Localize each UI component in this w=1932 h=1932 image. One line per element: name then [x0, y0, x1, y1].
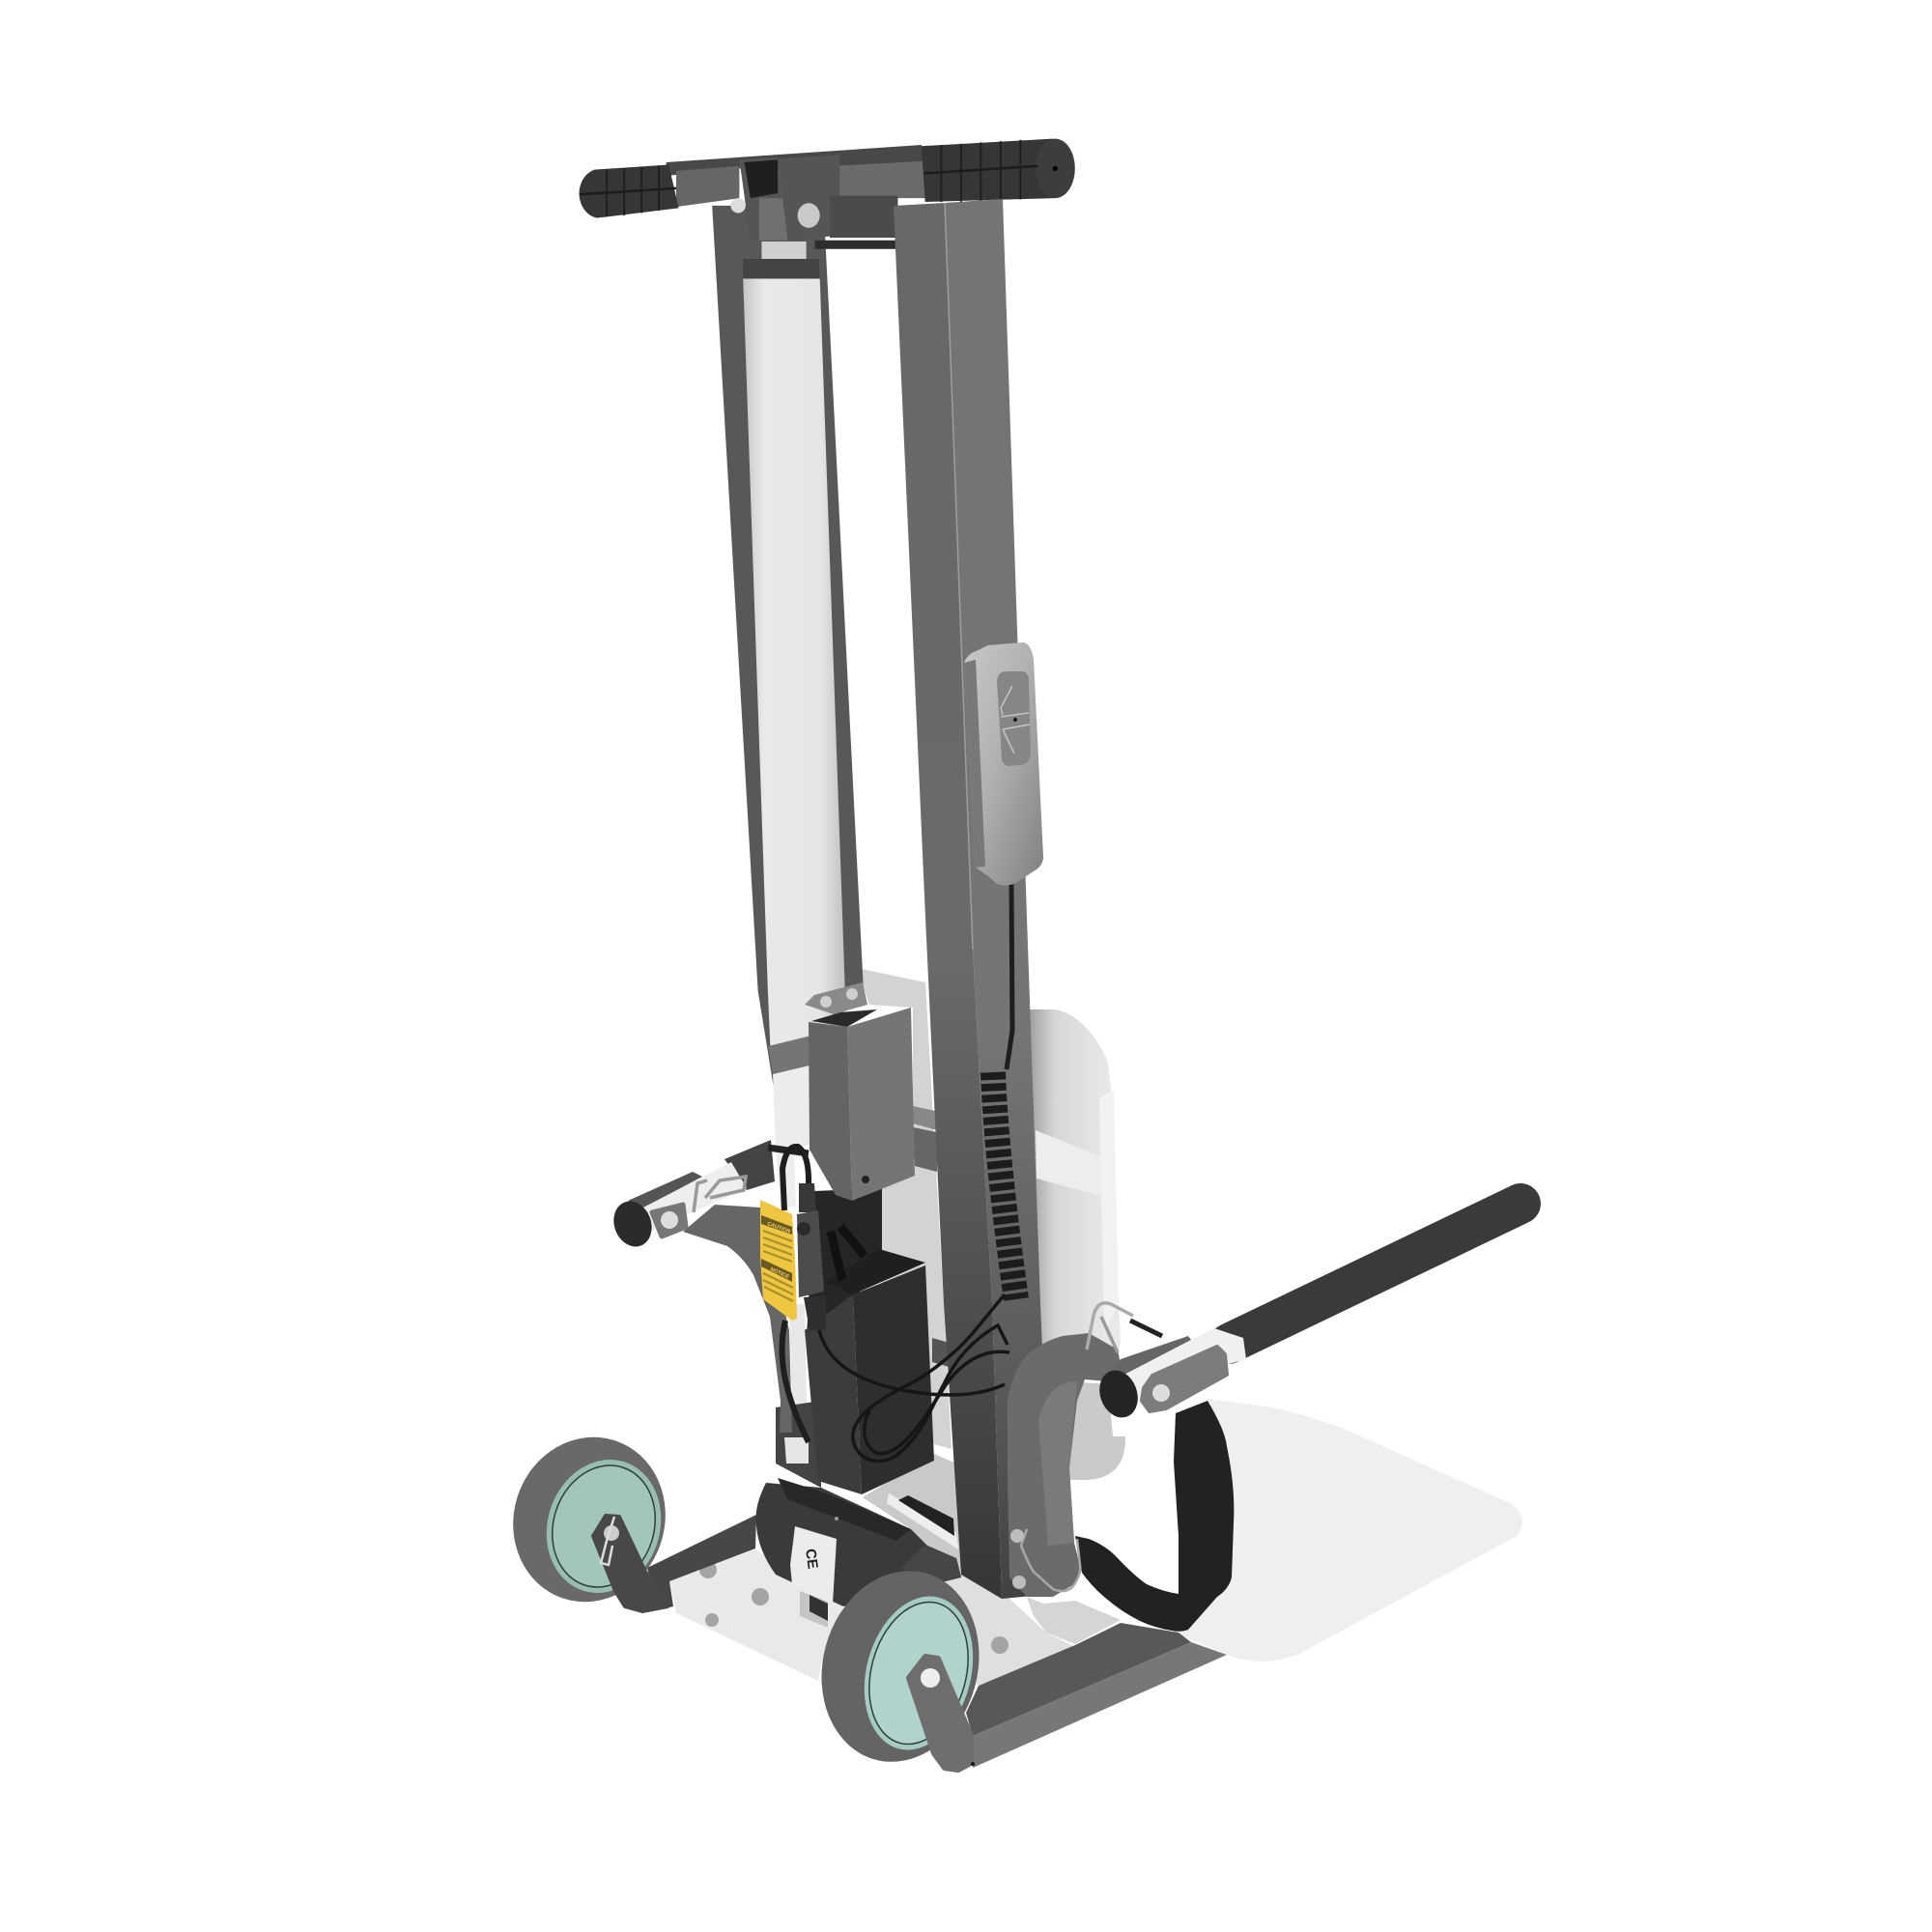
rear base arm	[647, 1515, 756, 1610]
handle bracket housing	[1067, 1381, 1125, 1480]
hook and pin	[1010, 1529, 1080, 1591]
mechanism behind power box	[863, 1454, 961, 1570]
carabiner and pin	[1087, 1303, 1162, 1352]
long side handle	[1094, 1204, 1520, 1423]
panel cross piece	[1036, 1130, 1101, 1196]
safety strap	[1075, 1401, 1234, 1632]
warning tag: CAUTION	[766, 1221, 791, 1235]
warning tag	[760, 1200, 797, 1321]
coiled remote cord	[993, 884, 1016, 1299]
right grip	[922, 139, 1075, 202]
top handle bar	[580, 139, 1075, 249]
drive motor	[755, 1478, 961, 1606]
front base frame	[966, 1623, 1227, 1768]
power supply box	[805, 1249, 934, 1494]
rear caster arm	[593, 1516, 668, 1611]
linear actuator tube	[743, 242, 846, 1488]
rear wheel	[492, 1417, 687, 1622]
motor label: CE	[802, 1548, 821, 1570]
base white mounting plate	[669, 1546, 1121, 1686]
hand remote	[964, 642, 1043, 885]
coiled power cables	[819, 1294, 1009, 1462]
cable tie and plug	[768, 1147, 865, 1442]
left grip	[580, 165, 679, 218]
front wheel	[801, 1553, 1000, 1779]
right upright post	[894, 199, 1053, 1599]
remote buttons	[997, 671, 1031, 766]
U-shaped handle bracket	[1008, 1333, 1121, 1597]
warning tag: NOTICE	[769, 1266, 790, 1280]
dark bracket behind power box	[807, 1188, 882, 1338]
left upright post	[712, 206, 864, 1090]
front caster arm	[909, 1657, 975, 1770]
motor label	[790, 1526, 837, 1604]
panel edge stripe	[1099, 1090, 1119, 1333]
back panel	[857, 968, 1121, 1449]
footplate	[1174, 1399, 1522, 1662]
control box	[805, 982, 915, 1201]
left handle assembly	[608, 1140, 792, 1433]
